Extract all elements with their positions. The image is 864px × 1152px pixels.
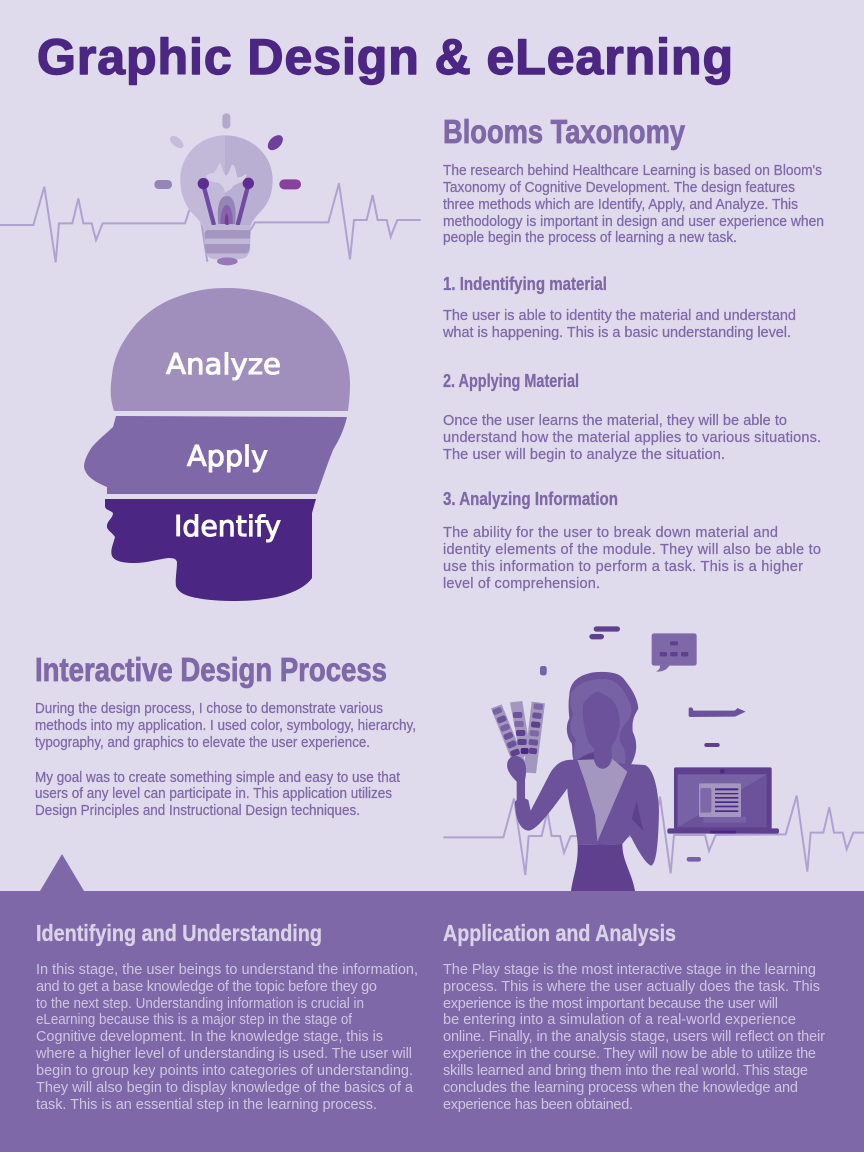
step 2: applying material: understand how the material applies to various situations. (443, 430, 821, 446)
step 3: analyzing information: use this information to perform a task. This is a higher (443, 559, 803, 575)
step 3: analyzing information (443, 489, 821, 592)
column: application and analysis: online. Finally, in the analysis stage, users will reflect on their (443, 1029, 825, 1045)
face and neck (583, 692, 620, 769)
column: identifying and understanding: begin to group key points into categories of understanding. (36, 1063, 413, 1079)
head segment: Analyze (111, 288, 350, 411)
head segment: Analyze: Analyze (166, 348, 281, 381)
step 2: applying material: The user will begin to analyze the situation. (443, 447, 725, 463)
step 1: identifying material: The user is able to identity the material and understand (443, 308, 796, 324)
title: Graphic Design & eLearning (37, 29, 733, 85)
step 1: identifying material: what is happening. This is a basic understanding level. (442, 325, 791, 341)
intro paragraph: three methods which are Identify, Apply, and Analyze. This (443, 197, 798, 213)
column: application and analysis: experience is the most important because the user will (443, 996, 778, 1012)
step 1: identifying material: 1. Indentifying material (443, 274, 607, 294)
step 2: applying material (443, 371, 821, 463)
arm fold (632, 801, 643, 831)
icon: laptop (667, 767, 779, 834)
column: application and analysis: The Play stage is the most interactive stage in the learning (443, 962, 816, 978)
column: application and analysis: skills learned and bring them into the real world. This stage (443, 1063, 808, 1079)
column: application and analysis (443, 920, 825, 1113)
section: Interactive Design Process (35, 651, 416, 819)
column: application and analysis: process. This is where the user actually does the task. This (443, 979, 820, 995)
paragraph: design methods: methods into my application. I used color, symbology, hierarchy, (35, 718, 416, 734)
paragraph: goal: users of any level can participate in. This application utilizes (35, 786, 392, 802)
intro paragraph: The research behind Healthcare Learning is based on Bloom's (443, 163, 822, 179)
paragraph: goal: Design Principles and Instructional Design techniques. (35, 803, 360, 819)
column: identifying and understanding: In this stage, the user beings to understand the information, (36, 962, 418, 978)
blouse (577, 757, 627, 842)
column: identifying and understanding (35, 920, 418, 1113)
paragraph: goal (35, 770, 400, 819)
column: application and analysis: experience has been obtained. (443, 1097, 633, 1113)
head segment: Identify: Identify (174, 510, 281, 543)
screw base (203, 225, 251, 265)
intro paragraph: people begin the process of learning a new task. (443, 230, 737, 246)
step 1: identifying material (442, 274, 796, 341)
section: Blooms Taxonomy intro (443, 113, 824, 246)
step 2: applying material: Once the user learns the material, they will be able to (443, 413, 787, 429)
head segment: Identify (105, 499, 316, 601)
column: application and analysis: Application and Analysis (443, 920, 676, 946)
bulb rays (154, 113, 301, 189)
paragraph: design methods: During the design process, I chose to demonstrate various (35, 701, 383, 717)
hair (567, 672, 638, 772)
filament (198, 162, 254, 226)
torso and arms (507, 756, 659, 866)
heading: Interactive Design Process: Interactive Design Process (35, 651, 387, 688)
under-hair shadow (577, 752, 594, 760)
column: identifying and understanding: Cognitive development. In the knowledge stage, this is (36, 1029, 383, 1045)
icon: pen (689, 707, 746, 717)
column: application and analysis: experience in the course. They will now be able to utilize the (443, 1046, 816, 1062)
floating dashes (540, 626, 720, 862)
paragraph: design methods (35, 701, 416, 751)
illustration: designer with swatches and laptop (491, 626, 779, 891)
column: identifying and understanding: eLearning because this is a major step in the stage of (36, 1012, 353, 1028)
intro paragraph (443, 163, 824, 246)
column: identifying and understanding: task. This is an essential step in the learning process. (36, 1097, 377, 1113)
intro paragraph: methodology is important in design and user experience when (443, 214, 824, 230)
icon: speech bubble (652, 633, 697, 672)
paragraph: design methods: typography, and graphics to elevate the user experience. (35, 735, 370, 751)
step 3: analyzing information: The ability for the user to break down material and (443, 525, 778, 541)
column: identifying and understanding: They will also begin to display knowledge of the basics of a (36, 1080, 414, 1096)
column: identifying and understanding: where a higher level of understanding is used. The user will (35, 1046, 412, 1062)
triangle pointer (40, 854, 84, 891)
column: application and analysis: be entering into a simulation of a real-world experience (443, 1012, 796, 1028)
heading: Blooms Taxonomy: Blooms Taxonomy (443, 113, 686, 150)
swatch fan (491, 701, 545, 773)
head segment: Apply (84, 416, 347, 494)
heartbeat line behind designer (443, 796, 864, 875)
head diagram (84, 288, 350, 601)
paragraph: goal: My goal was to create something simple and easy to use that (35, 770, 400, 786)
icon: light bulb (154, 113, 301, 265)
woman figure (507, 672, 659, 891)
glass bulb (180, 135, 273, 226)
step 2: applying material: 2. Applying Material (443, 371, 579, 391)
column: identifying and understanding: Identifying and Understanding (36, 920, 322, 946)
skirt (571, 844, 635, 891)
intro paragraph: Taxonomy of Cognitive Development. The design features (443, 180, 795, 196)
step 3: analyzing information: 3. Analyzing Information (443, 489, 618, 509)
column: application and analysis: concludes the learning process when the knowledge and (443, 1080, 798, 1096)
column: identifying and understanding: to the next step. Understanding information is crucial in (36, 996, 364, 1012)
step 3: analyzing information: identity elements of the module. They will also be able to (443, 542, 821, 558)
panel: learning stages (0, 891, 864, 1152)
head segment: Apply: Apply (187, 440, 268, 473)
heartbeat line behind light bulb (0, 183, 421, 262)
column: identifying and understanding: and to get a base knowledge of the topic before they go (36, 979, 377, 995)
step 3: analyzing information: level of comprehension. (443, 576, 600, 592)
